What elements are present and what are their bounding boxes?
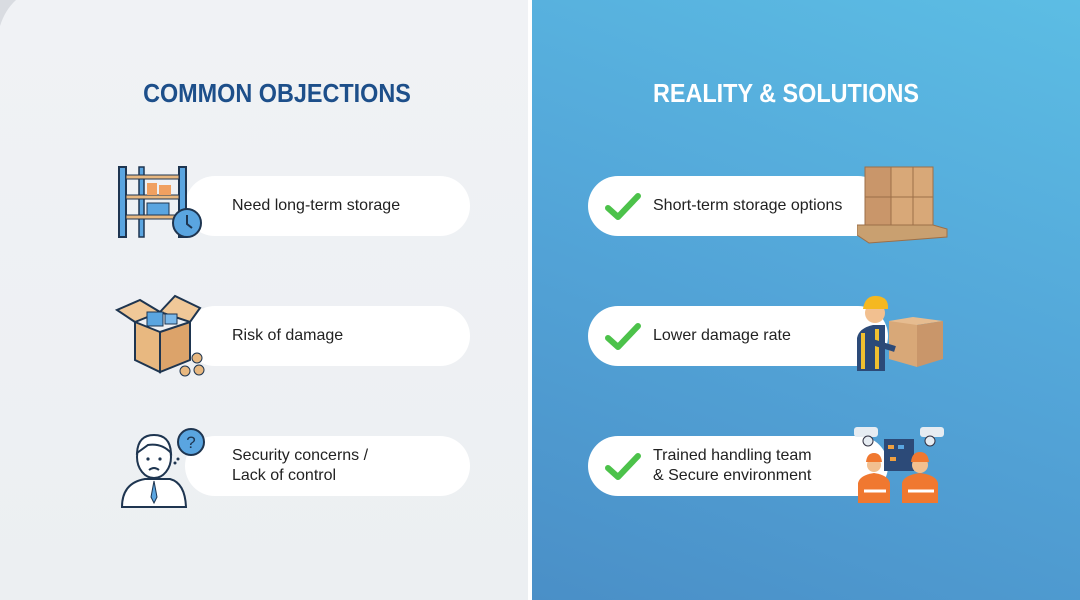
icon: check [605,453,641,480]
pill: lower damage rate: Lower damage rate [653,327,791,344]
icon: check [605,323,641,350]
pill: security concerns: Lack of control [232,467,336,484]
pill: security concerns: Security concerns / [232,447,368,464]
pill: security concerns [185,436,470,496]
pill: need long-term storage: Need long-term storage [232,197,400,214]
pill: short-term storage options [588,176,888,236]
panel: common objections [0,0,528,600]
pill: short-term storage options: Short-term storage options [653,197,842,214]
pill: trained handling team [588,436,888,496]
pill: need long-term storage [185,176,470,236]
pill: risk of damage [185,306,470,366]
title: reality & solutions: REALITY & SOLUTIONS [653,78,919,108]
pill: lower damage rate [588,306,888,366]
panel: reality & solutions [532,0,1080,600]
icon: check [605,193,641,220]
icon: worker carrying box [857,296,943,371]
icon: team and cameras [854,427,944,503]
title: common objections: COMMON OBJECTIONS [143,78,411,108]
icon: pallet of boxes [857,166,948,244]
icon: open box [115,294,204,376]
icon: worried man: ? [186,433,196,452]
pill: trained handling team: Trained handling team [653,447,812,464]
icon: shelving with clock [118,166,202,238]
pill: risk of damage: Risk of damage [232,327,343,344]
pill: trained handling team: & Secure environment [653,467,811,484]
icon: worried man [121,428,205,508]
